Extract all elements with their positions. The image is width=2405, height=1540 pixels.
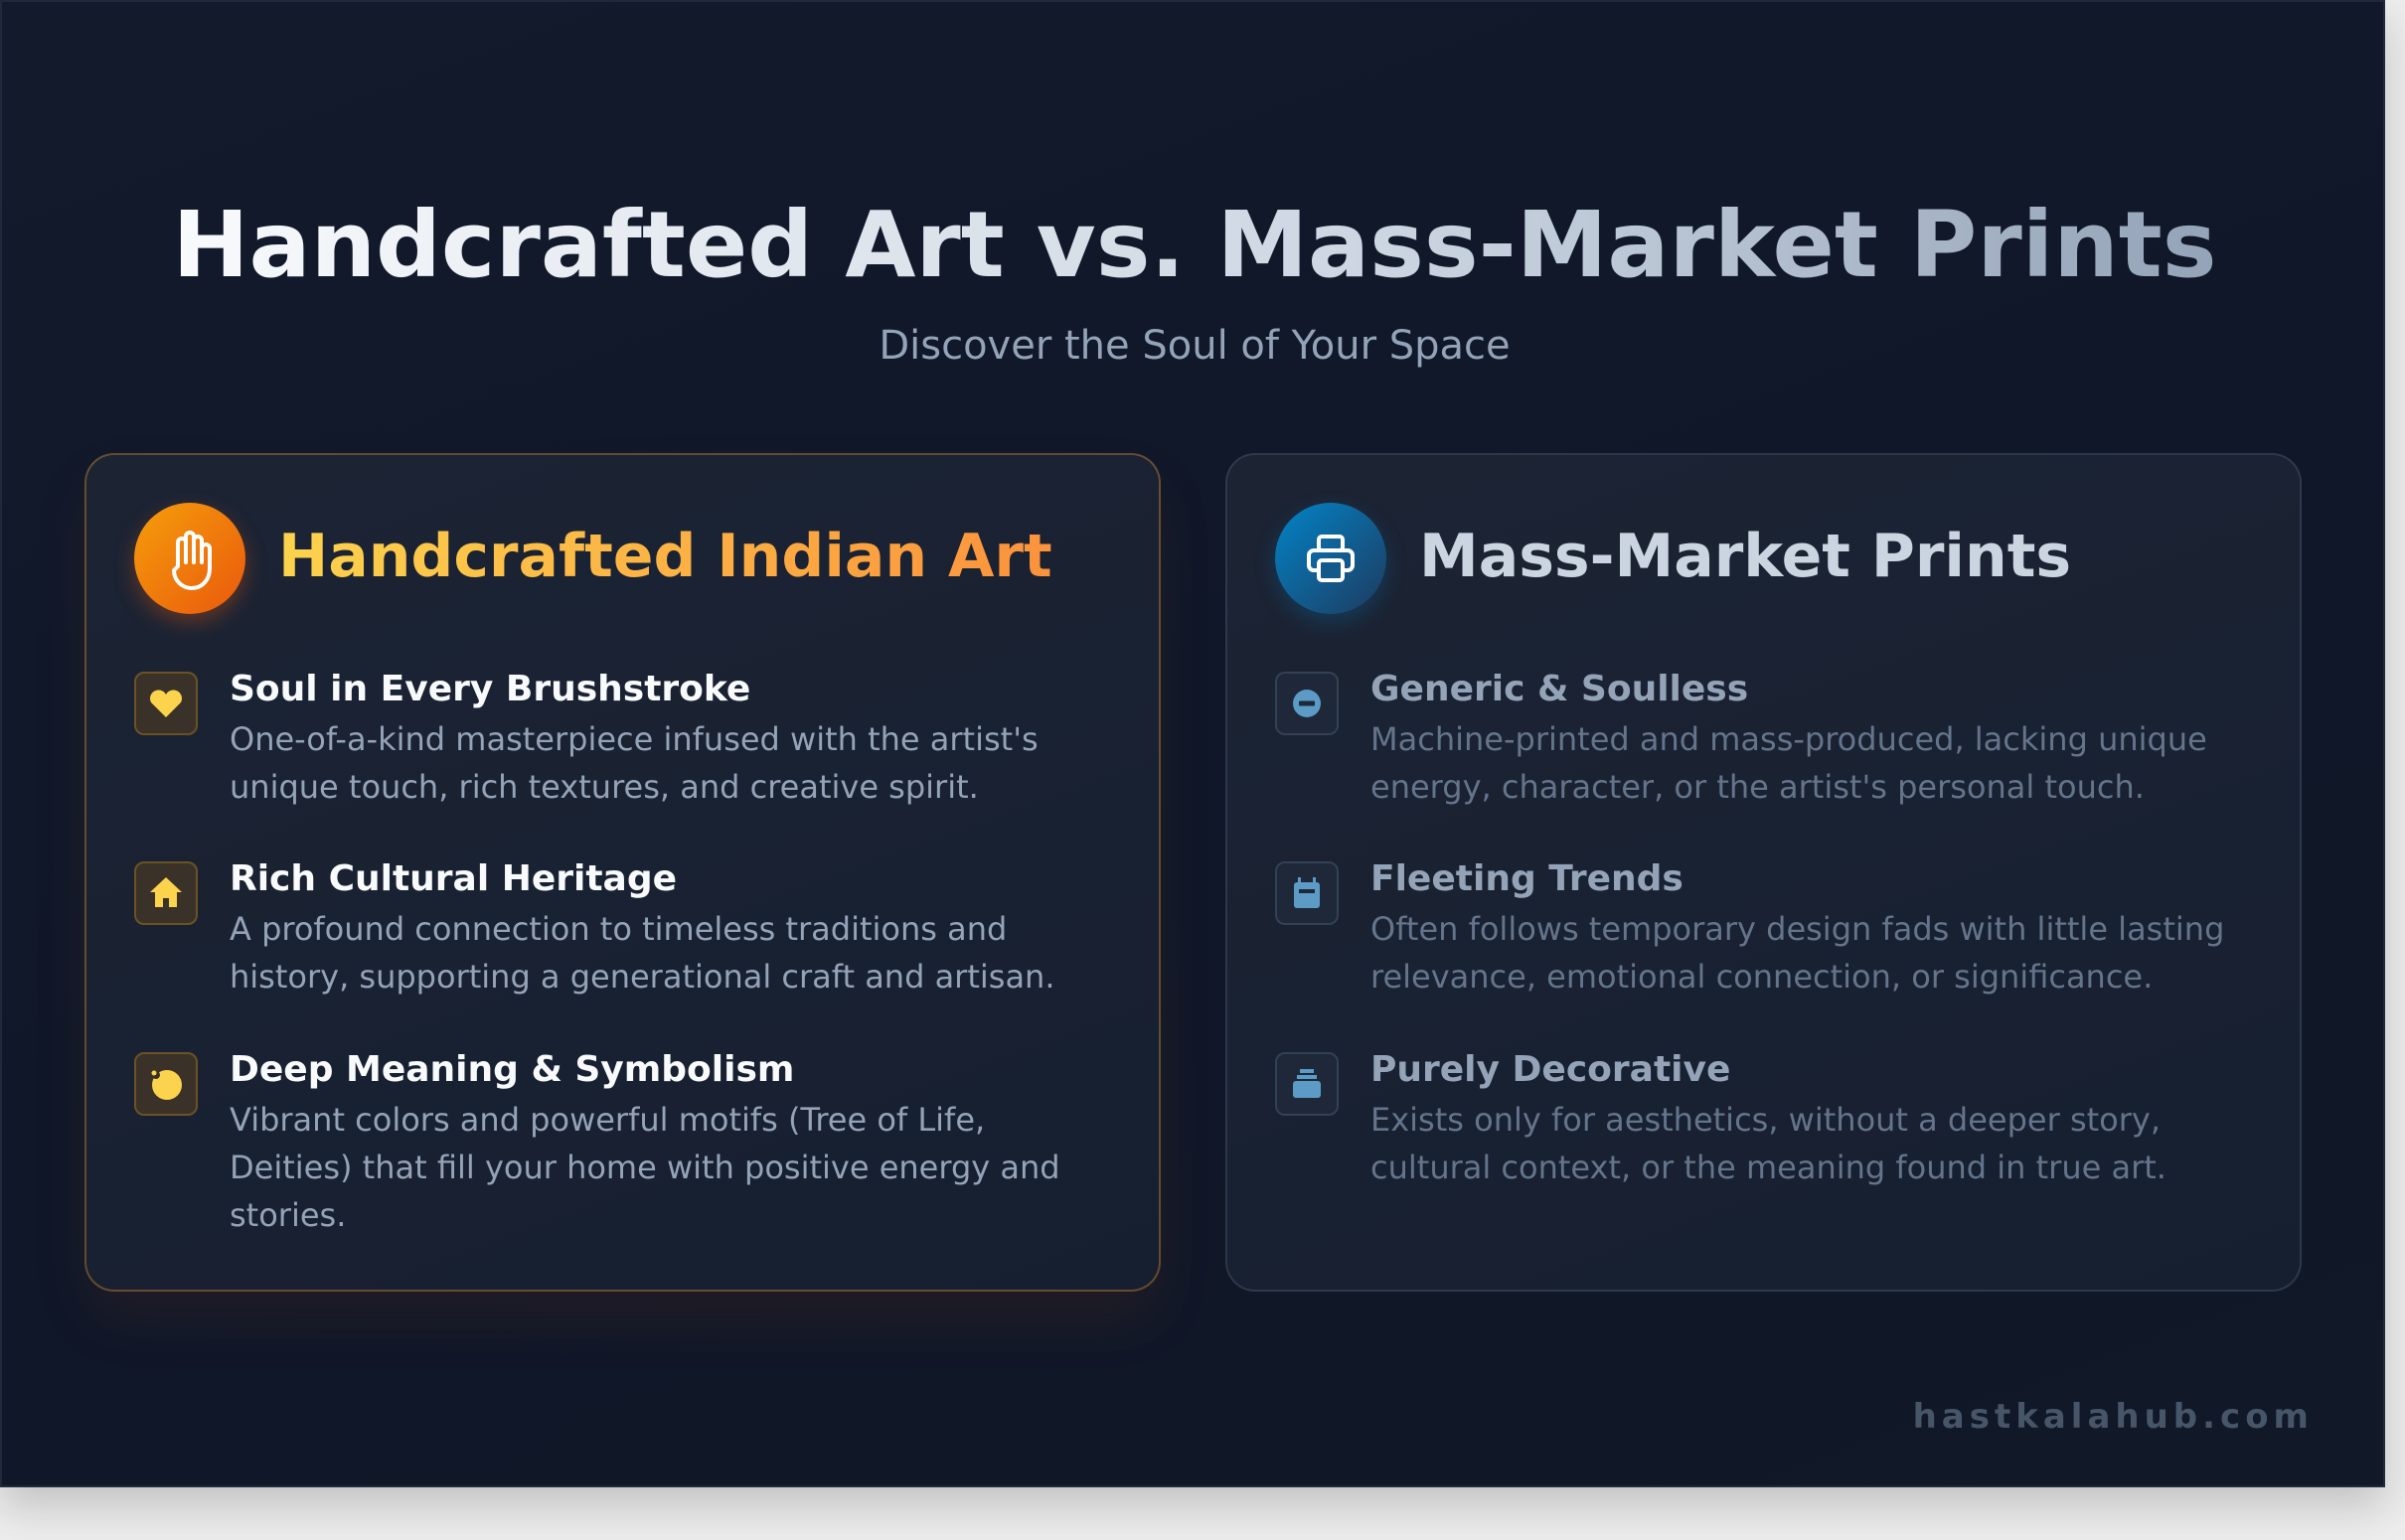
item 3 bbox=[134, 1049, 1060, 1234]
panel: mass-market bbox=[1225, 453, 2302, 1292]
item 2: history, supporting a generational craft and artisan. bbox=[230, 958, 1055, 996]
item 1 bbox=[1275, 669, 2207, 806]
item 3: Exists only for aesthetics, without a deeper story, bbox=[1370, 1101, 2161, 1139]
item 3: Purely Decorative bbox=[1370, 1049, 1730, 1090]
item 2 bbox=[134, 858, 1055, 996]
item 2: Often follows temporary design fads with little lasting bbox=[1370, 910, 2224, 948]
item 1: Machine-printed and mass-produced, lacking unique bbox=[1370, 720, 2207, 758]
item 1: unique touch, rich textures, and creative spirit. bbox=[230, 768, 979, 806]
icon: hand bbox=[134, 503, 245, 614]
item 2: Rich Cultural Heritage bbox=[230, 858, 677, 899]
item 1 bbox=[134, 669, 1039, 806]
title: Handcrafted Art vs. Mass-Market Prints bbox=[172, 192, 2217, 298]
item 1: energy, character, or the artist's personal touch. bbox=[1370, 768, 2145, 806]
item 3: Deities) that fill your home with positive energy and bbox=[230, 1149, 1060, 1186]
footer: hastkalahub.com bbox=[1913, 1397, 2314, 1437]
panel: handcrafted bbox=[84, 453, 1161, 1292]
item 2: relevance, emotional connection, or significance. bbox=[1370, 958, 2153, 996]
icon: layers bbox=[1275, 1052, 1339, 1116]
item 3: cultural context, or the meaning found in true art. bbox=[1370, 1149, 2166, 1186]
icon: printer bbox=[1275, 503, 1386, 614]
item 2: Fleeting Trends bbox=[1370, 858, 1684, 899]
item 1: Soul in Every Brushstroke bbox=[230, 669, 750, 709]
item 1: One-of-a-kind masterpiece infused with the artist's bbox=[230, 720, 1039, 758]
heading: Handcrafted Indian Art bbox=[278, 522, 1052, 591]
icon: minus bbox=[1275, 672, 1339, 735]
item 3 bbox=[1275, 1049, 2166, 1186]
item 3: stories. bbox=[230, 1196, 346, 1234]
icon: symbol bbox=[134, 1052, 198, 1116]
heading: Mass-Market Prints bbox=[1419, 522, 2071, 591]
item 2: A profound connection to timeless traditions and bbox=[230, 910, 1007, 948]
icon: home bbox=[134, 861, 198, 925]
item 3: Vibrant colors and powerful motifs (Tree of Life, bbox=[230, 1101, 985, 1139]
icon: heart bbox=[134, 672, 198, 735]
icon: calendar bbox=[1275, 861, 1339, 925]
item 3: Deep Meaning & Symbolism bbox=[230, 1049, 794, 1090]
item 1: Generic & Soulless bbox=[1370, 669, 1748, 709]
item 2 bbox=[1275, 858, 2224, 996]
subtitle: Discover the Soul of Your Space bbox=[879, 323, 1511, 369]
